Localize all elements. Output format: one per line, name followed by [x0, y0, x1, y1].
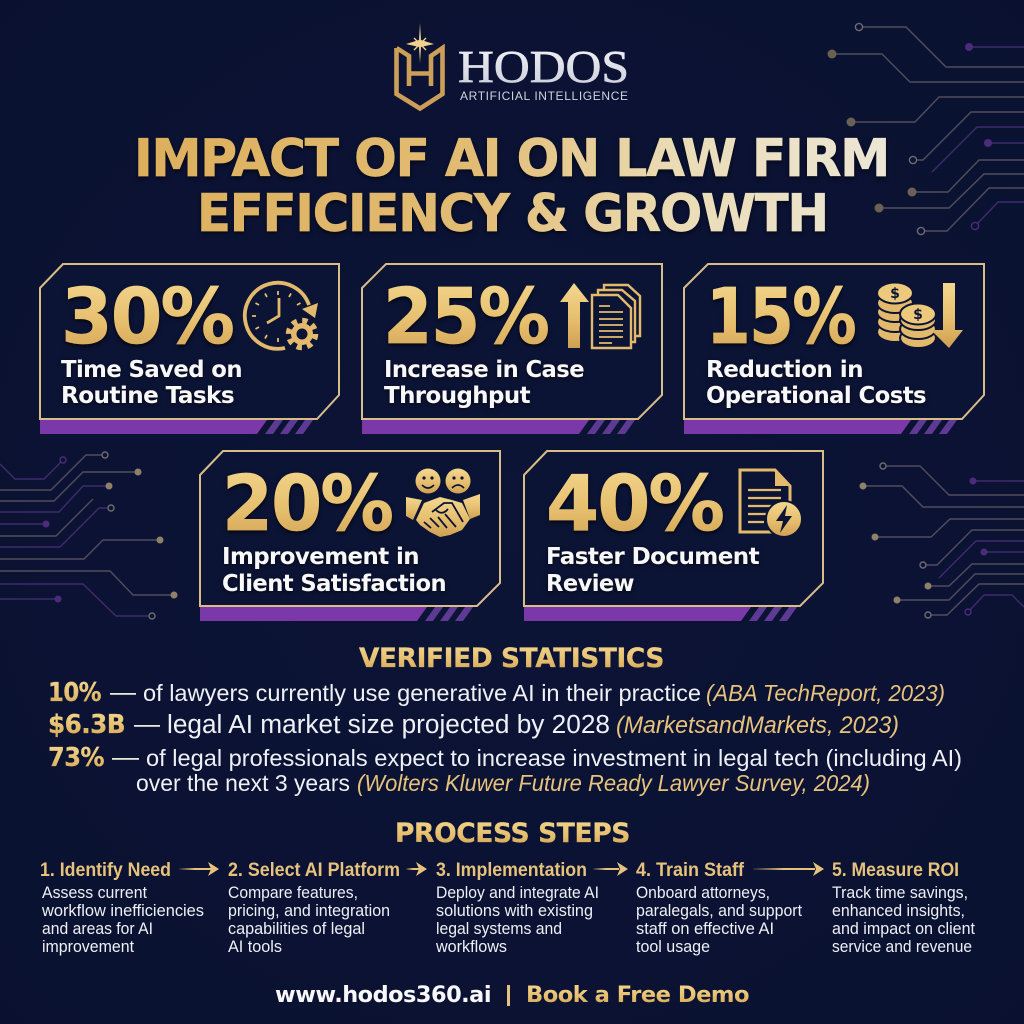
process step 2: pricing, and integration — [228, 901, 390, 920]
process step 5: service and revenue — [832, 937, 972, 956]
label: operational costs: Operational Costs — [706, 381, 926, 409]
label: client satisfaction: Client Satisfaction — [222, 569, 446, 597]
logo — [396, 23, 629, 108]
stat: 10%: 10% — [48, 678, 101, 708]
label: operational costs: Reduction in — [706, 355, 863, 383]
arrow: step 3 to 4 — [593, 862, 628, 876]
stat: 30%: 30% — [61, 273, 233, 362]
panel: case throughput — [362, 264, 662, 434]
stat: 10%: of lawyers currently use generative AI in their practice — [143, 680, 701, 706]
footer call to action: Book a Free Demo — [526, 983, 749, 1008]
icon: coin dollar signs — [890, 286, 923, 323]
panel: time saved — [40, 264, 339, 434]
process step 3: solutions with existing — [436, 901, 593, 920]
process step 1: and areas for AI — [42, 919, 153, 938]
process step 5: 5. Measure ROI — [832, 859, 959, 881]
icon: document stack — [592, 285, 640, 348]
footer call to action — [275, 983, 749, 1008]
process step 3: legal systems and — [436, 919, 562, 938]
background circuit lines — [0, 23, 1024, 619]
label: document review: Review — [546, 569, 634, 597]
heading: process steps: PROCESS STEPS — [395, 818, 630, 849]
stat: 15%: 15% — [706, 273, 855, 362]
arrow: step 4 to 5 — [753, 862, 824, 876]
verified statistics list — [48, 678, 962, 796]
icon: coins — [877, 282, 936, 348]
icon: document with lightning — [740, 470, 802, 537]
icon: up arrow — [560, 283, 589, 348]
process step 5: Track time savings, — [832, 883, 968, 902]
process step 5 — [832, 859, 975, 956]
process step 3: 3. Implementation — [436, 859, 587, 881]
icon: coin dollar signs: $ — [913, 307, 923, 323]
stat: $6.3B: legal AI market size projected by 2028 — [167, 711, 610, 739]
stat: 25%: 25% — [383, 273, 548, 362]
process step 5: enhanced insights, — [832, 901, 965, 920]
stat: 73%: over the next 3 years — [136, 770, 350, 796]
process step 2: AI tools — [228, 937, 282, 956]
stat: 73%: of legal professionals expect to increase investment in legal tech (including AI) — [146, 745, 962, 771]
stat: 10% — [48, 678, 945, 708]
process step 3 — [435, 859, 599, 956]
process step 2: Compare features, — [228, 883, 358, 902]
label: case throughput: Increase in Case — [384, 355, 584, 383]
title: IMPACT OF AI ON LAW FIRM — [134, 129, 889, 189]
icon: handshake — [406, 494, 480, 537]
process step 4: 4. Train Staff — [636, 859, 744, 881]
label: client satisfaction: Improvement in — [222, 542, 419, 570]
process step 1: improvement — [42, 937, 134, 956]
stat: 40%: 40% — [546, 460, 723, 549]
footer call to action: www.hodos360.ai — [275, 983, 491, 1008]
stat: $6.3B — [48, 710, 899, 740]
heading: verified statistics: VERIFIED STATISTICS — [359, 643, 664, 674]
icon: shield with star — [396, 23, 442, 108]
process step 2 — [228, 859, 400, 956]
label: time saved: Routine Tasks — [61, 381, 234, 409]
stat: $6.3B: $6.3B — [48, 710, 125, 740]
process step 2: capabilities of legal — [228, 919, 365, 938]
process step 4: paralegals, and support — [636, 901, 802, 920]
stat: 73%: 73% — [48, 743, 105, 773]
process step 5: and impact on client — [832, 919, 975, 938]
brand tagline: ARTIFICIAL INTELLIGENCE — [460, 89, 628, 103]
icon: coin dollar signs: $ — [890, 286, 900, 302]
process step 4 — [636, 859, 802, 956]
process step 1 — [40, 859, 204, 956]
icon: down arrow — [931, 283, 963, 348]
arrow: step 1 to 2 — [179, 862, 219, 876]
process step 4: Onboard attorneys, — [636, 883, 770, 902]
process step 1: workflow inefficiencies — [41, 901, 204, 920]
icon: happy and sad faces — [416, 468, 470, 494]
process step 3: Deploy and integrate AI — [436, 883, 599, 902]
arrow: step 2 to 3 — [406, 862, 427, 876]
brand name: HODOS — [458, 41, 629, 92]
process step 1: 1. Identify Need — [40, 859, 171, 881]
panel: client satisfaction — [200, 451, 500, 621]
stat: 10%: (ABA TechReport, 2023) — [706, 680, 945, 706]
label: document review: Faster Document — [546, 542, 759, 570]
label: time saved: Time Saved on — [61, 355, 242, 383]
panel: document review — [524, 451, 823, 621]
title: EFFICIENCY & GROWTH — [197, 184, 828, 244]
stat: 73%: (Wolters Kluwer Future Ready Lawyer Survey, 2024) — [357, 770, 870, 796]
stat: $6.3B: (MarketsandMarkets, 2023) — [616, 712, 899, 739]
stat: 20%: 20% — [222, 460, 392, 549]
panel: operational costs — [684, 264, 984, 434]
title — [134, 129, 889, 244]
process step 4: tool usage — [636, 937, 710, 956]
label: case throughput: Throughput — [384, 381, 530, 409]
stat: 73% — [48, 743, 962, 796]
process step 3: workflows — [435, 937, 507, 956]
icon: clock with gear — [245, 283, 318, 349]
process step 4: staff on effective AI — [636, 919, 774, 938]
process step 2: 2. Select AI Platform — [228, 859, 400, 881]
process step 1: Assess current — [42, 883, 147, 902]
